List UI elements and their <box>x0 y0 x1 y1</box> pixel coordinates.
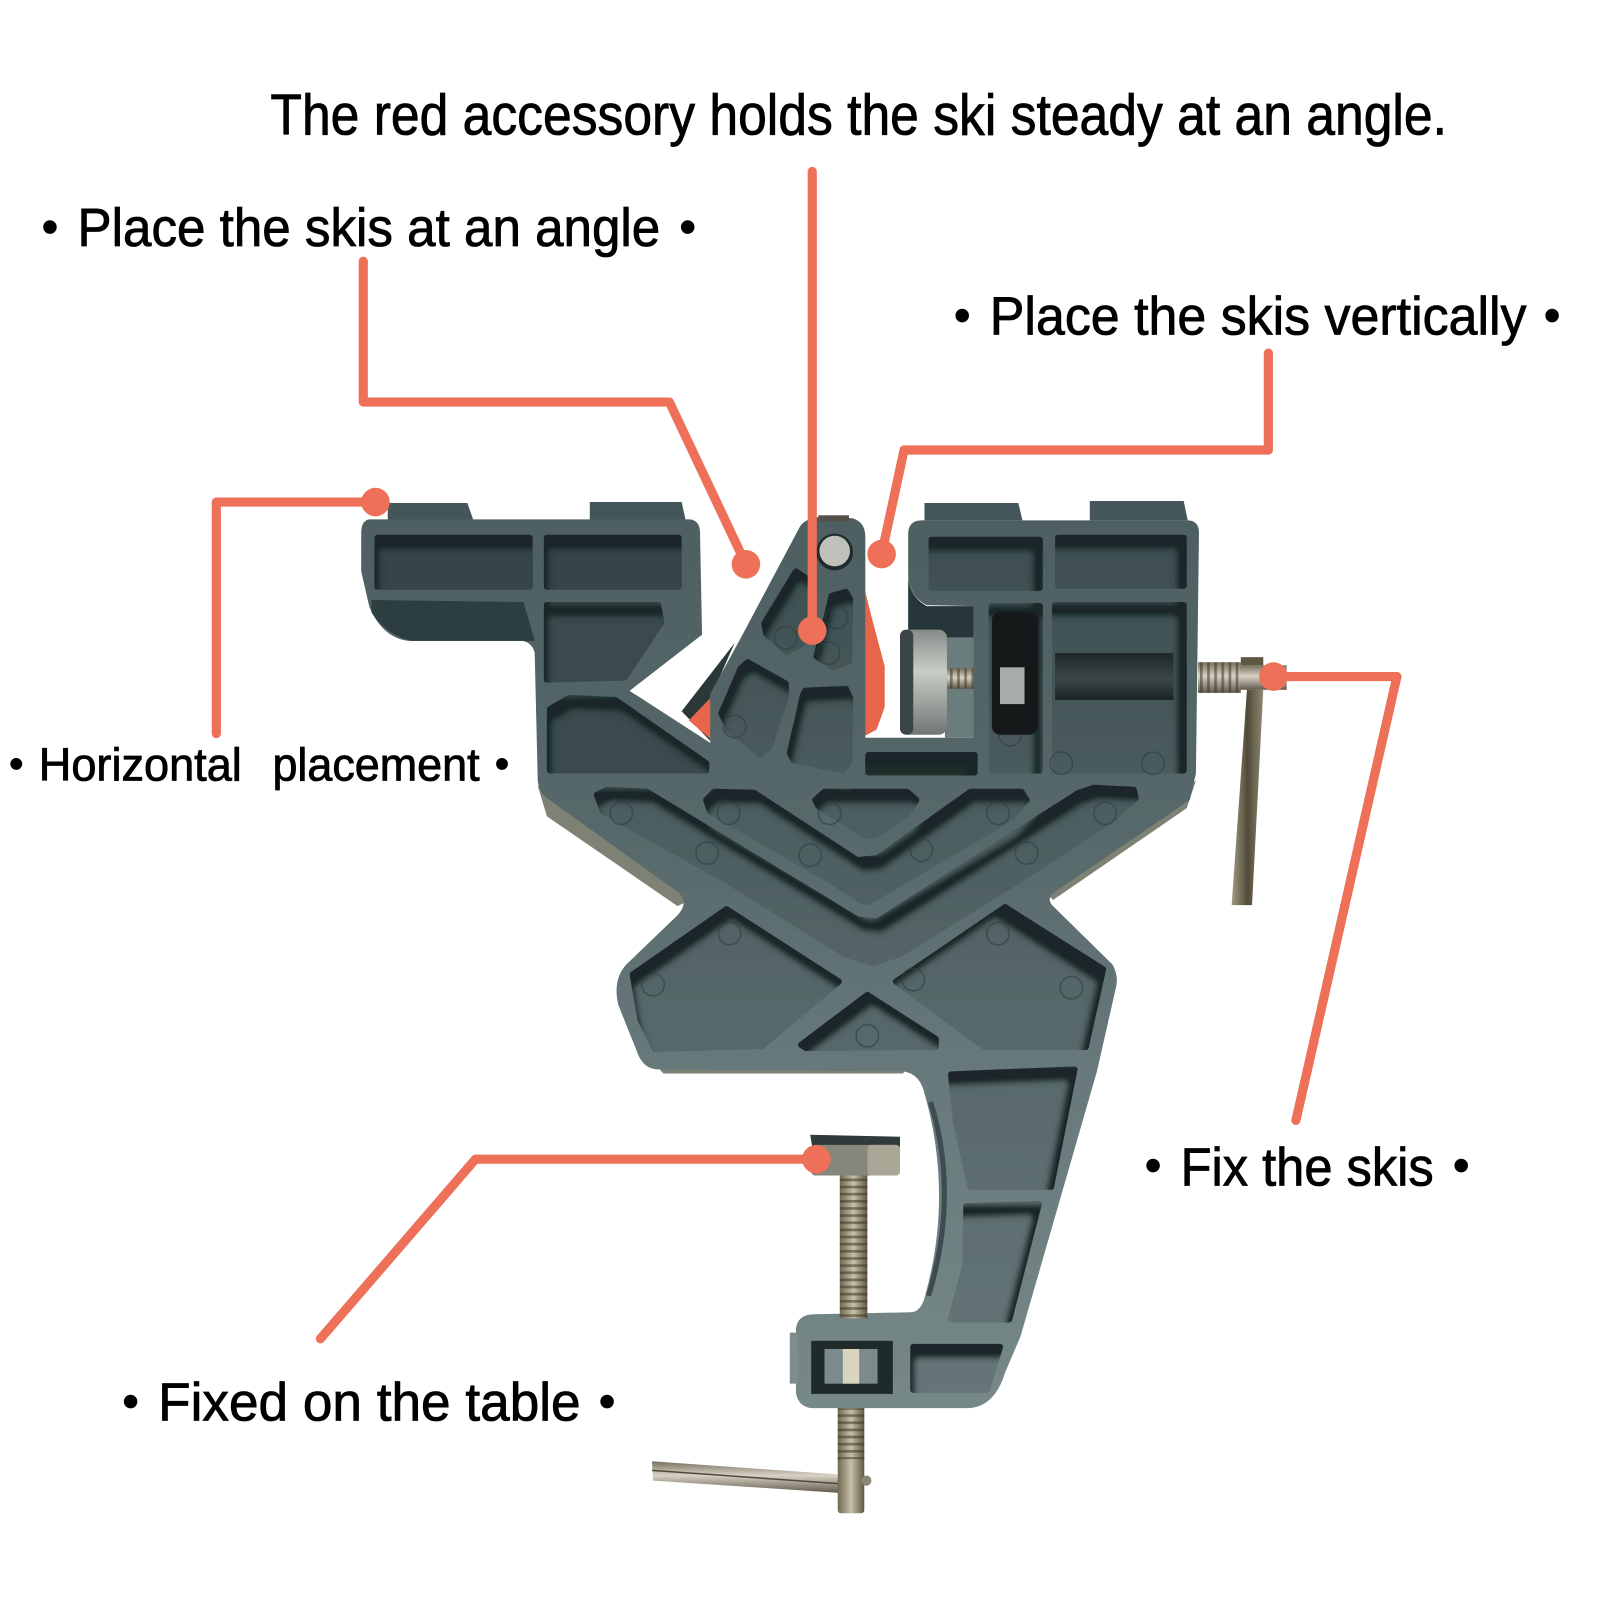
label: fixed on the table: Fixed on the table <box>158 1372 581 1432</box>
product photo: ski vise <box>361 501 1287 1513</box>
bearing and knob assembly <box>900 612 1173 735</box>
right pockets <box>868 538 1184 1319</box>
label: horizontal placement: Horizontal <box>39 739 242 791</box>
label: place the skis at an angle: Place the skis at an angle <box>78 198 660 258</box>
ejector pin marks <box>610 606 1164 1047</box>
bearing block at base of clamp <box>811 1341 893 1394</box>
centre screw <box>816 515 853 570</box>
right clamp handle <box>1198 657 1287 905</box>
callout line: red accessory <box>798 171 827 645</box>
label: horizontal placement: • <box>495 741 509 787</box>
label: fixed on the table: • <box>122 1375 139 1427</box>
label: place the skis vertically: Place the skis vertically <box>990 287 1527 347</box>
moulded edge strips <box>538 781 1196 1073</box>
label: red accessory: The red accessory holds the ski steady at an angle. <box>270 84 1447 148</box>
vise body <box>361 516 1199 1408</box>
label: fix the skis: Fix the skis <box>1181 1138 1434 1198</box>
callout line: fix the skis <box>1259 662 1397 1120</box>
label: fix the skis: • <box>1145 1140 1161 1192</box>
label: horizontal placement: placement <box>272 739 480 791</box>
label: fix the skis: • <box>1453 1140 1469 1192</box>
left pockets <box>378 538 1136 1390</box>
base side tab <box>790 1333 798 1384</box>
label: fixed on the table: • <box>599 1375 615 1427</box>
callout line: horizontal placement <box>216 488 390 734</box>
label: place the skis at an angle: • <box>680 201 696 253</box>
callout line: vertical placement <box>867 353 1268 568</box>
label: place the skis at an angle: • <box>42 201 58 253</box>
label: place the skis vertically: • <box>954 290 970 342</box>
label: horizontal placement: • <box>9 741 23 787</box>
clamp pad <box>810 1135 900 1176</box>
table clamp screw <box>652 1173 871 1513</box>
label: horizontal placement <box>9 739 509 791</box>
left block underside <box>371 600 535 641</box>
shadow behind bearing <box>908 578 973 638</box>
clamp inner groove <box>929 1102 944 1296</box>
callout line: angled placement <box>363 261 760 579</box>
red accessory <box>682 584 885 741</box>
callout line: fixed on the table <box>320 1145 831 1339</box>
rubber pads <box>388 501 1188 520</box>
label: place the skis vertically: • <box>1544 290 1560 342</box>
